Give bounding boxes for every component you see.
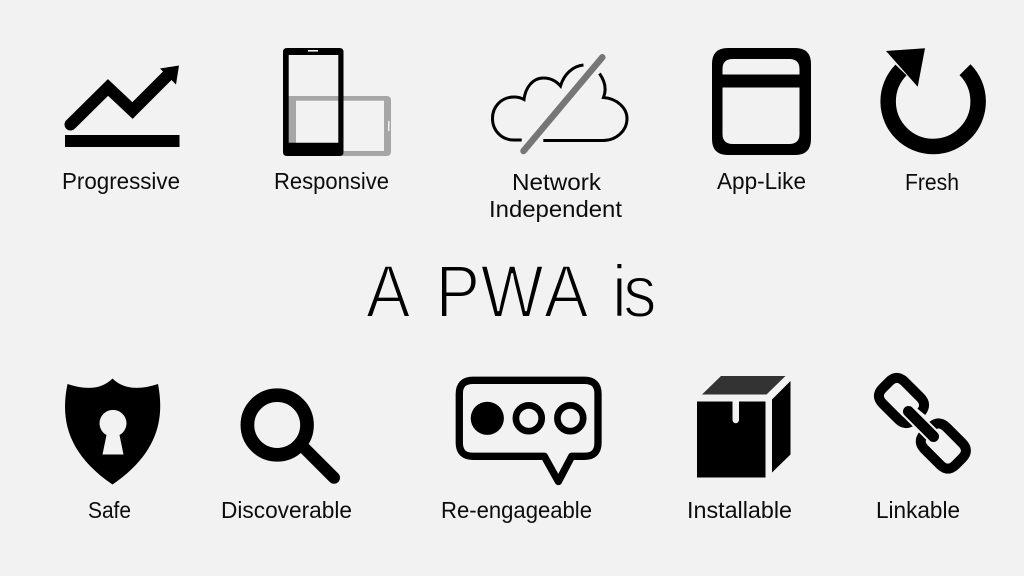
item: App-Like <box>712 48 811 194</box>
icon: cardboard box <box>697 376 790 478</box>
label: App-Like: App-Like <box>717 168 806 194</box>
icon: rising trend line <box>65 66 180 147</box>
label: Network Independent: Independent <box>489 196 623 222</box>
icon: shield with keyhole <box>65 378 160 484</box>
label: Installable: Installable <box>687 497 792 523</box>
label: Safe: Safe <box>88 497 131 523</box>
label: Progressive: Progressive <box>62 168 180 194</box>
label: Re-engageable: Re-engageable <box>441 497 592 523</box>
icon: phone and rotated tablet <box>283 48 391 156</box>
icon: crossed-out cloud <box>492 57 627 151</box>
label: Responsive: Responsive <box>274 168 389 194</box>
item: Re-engageable <box>441 380 598 523</box>
item: Linkable <box>875 374 970 523</box>
icon: app window <box>712 48 811 155</box>
label: Network Independent <box>489 169 623 222</box>
label: Discoverable: Discoverable <box>221 497 352 523</box>
item: Safe <box>65 378 160 523</box>
item: Fresh <box>886 48 978 195</box>
icon: magnifying glass <box>247 395 334 478</box>
item: Responsive <box>274 48 391 194</box>
title: A PWA is <box>366 250 657 333</box>
item: Progressive <box>62 66 180 194</box>
icon: refresh arrow <box>886 48 978 146</box>
item: Discoverable <box>221 395 352 523</box>
icon: speech bubble with dots <box>459 380 598 482</box>
label: Network Independent: Network <box>512 169 602 195</box>
item: Network Independent <box>489 57 627 222</box>
label: Fresh: Fresh <box>905 169 959 195</box>
label: Linkable: Linkable <box>876 497 960 523</box>
icon: chain links <box>875 374 970 473</box>
item: Installable <box>687 376 792 523</box>
